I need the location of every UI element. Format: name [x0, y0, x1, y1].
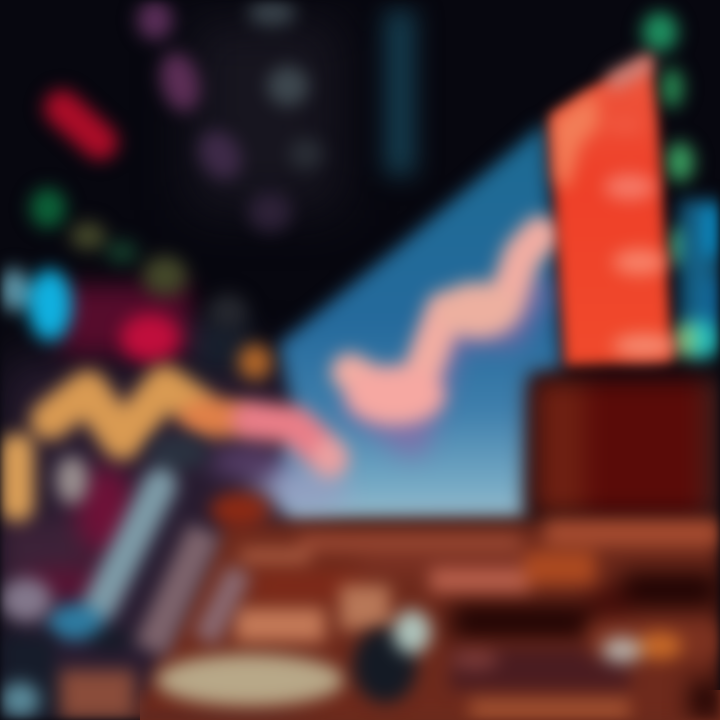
background: desk base along bottom edge [140, 690, 720, 720]
green markers on the right [642, 12, 699, 266]
background: lower left maroon [0, 285, 250, 603]
grey sphere [353, 610, 431, 703]
background: central haze [0, 20, 340, 720]
chart: pink rising line [345, 235, 540, 425]
lower left dark objects [0, 456, 135, 720]
desk highlights [210, 492, 720, 720]
orange line left [17, 344, 272, 505]
chart: red tower [550, 55, 672, 366]
crimson marker [120, 314, 180, 362]
blue marker on the right edge [673, 200, 720, 360]
chart: blue area [270, 122, 562, 522]
desk dark stripes [250, 555, 720, 720]
pedestal [532, 378, 720, 518]
desk surface [130, 520, 720, 720]
cyan marker [0, 268, 72, 341]
chart: lilac halo behind the line [208, 280, 540, 512]
pink line middle [250, 420, 348, 478]
red candle [62, 108, 100, 142]
cream dish [156, 654, 344, 706]
tower highlights [552, 52, 677, 358]
teal vertical streak [385, 10, 415, 175]
grey diagonal pens [47, 434, 240, 650]
green candle [30, 188, 66, 228]
grey dots [208, 0, 323, 330]
olive ticker marks [70, 222, 187, 296]
purple dotted diagonal [137, 0, 292, 232]
